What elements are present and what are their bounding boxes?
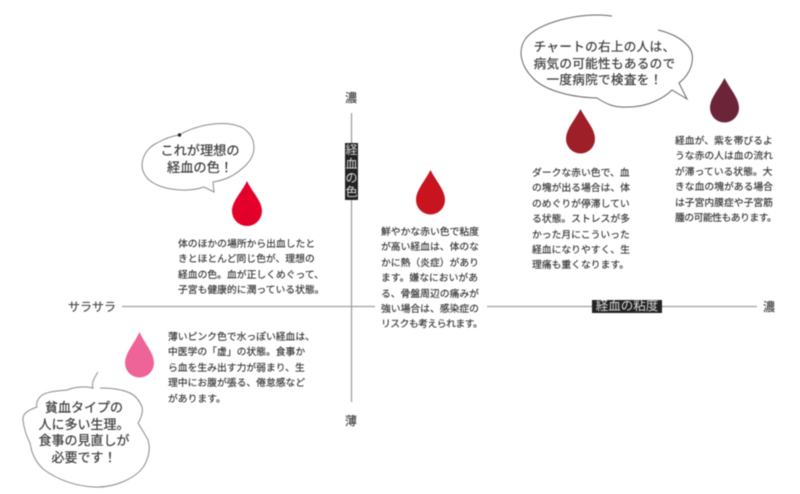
speech bubble: anemia type: 必要です！ xyxy=(51,450,116,465)
description: purple: きな血の塊がある場合 xyxy=(675,182,773,193)
description: ideal colour: きとほとんど同じ色が、理想の xyxy=(178,254,315,265)
speech bubble: anemia type: 貧血タイプの xyxy=(45,400,123,415)
axis label: thin: 薄 xyxy=(345,414,357,428)
description: vivid red: が高い経血は、体のな xyxy=(381,242,479,253)
description: dark red: かった月にこういった xyxy=(532,230,630,241)
description: purple: が滞っている状態。大 xyxy=(675,167,772,178)
speech bubble: ideal colour: 経血の色！ xyxy=(167,160,233,174)
description: dark red: 理痛も重くなります。 xyxy=(532,260,629,271)
description: pink: 薄いピンク色で水っぽい経血は、 xyxy=(168,332,315,343)
axis label: viscous: 濃 xyxy=(763,300,775,314)
description: vivid red: 鮮やかな赤い色で粘度 xyxy=(381,227,479,238)
description: purple xyxy=(674,134,776,224)
description: dark red: のめぐりが停滞してい xyxy=(532,199,630,210)
description: purple: 腫の可能性もあります。 xyxy=(675,213,776,224)
description: ideal colour: 子宮も健康的に潤っている状態。 xyxy=(178,285,324,296)
description: ideal colour: 体のほかの場所から出血したと xyxy=(178,239,315,250)
speech bubble: anemia type: 人に多い生理。 xyxy=(38,417,130,432)
description: dark red xyxy=(532,166,630,271)
description: dark red: ダークな赤い色で、血 xyxy=(532,168,630,179)
description: pink: があります。 xyxy=(168,394,226,405)
description: vivid red: かに熱（炎症）があり xyxy=(381,258,479,269)
description: purple: は子宮内膜症や子宮筋 xyxy=(675,198,773,209)
description: purple: うな赤の人は血の流れ xyxy=(675,151,773,162)
description: vivid red xyxy=(380,226,482,330)
horizontal axis title: 経血の粘度 xyxy=(596,299,658,313)
speech bubble: anemia type: 食事の見直しが xyxy=(38,433,130,448)
description: pink: 中医学の「虚」の状態。食事か xyxy=(168,347,305,358)
speech bubble: see a doctor: 病気の可能性もあるので xyxy=(534,56,675,70)
description: ideal colour: 経血の色。血が正しくめぐって、 xyxy=(178,270,324,281)
description: pink: ら血を生み出す力が弱まり、生 xyxy=(168,363,305,374)
description: purple: 経血が、紫を帯びるよ xyxy=(675,136,773,147)
description: pink xyxy=(168,330,315,405)
speech bubble: ideal colour: これが理想の xyxy=(160,143,240,158)
description: ideal colour xyxy=(178,238,324,296)
axis label: thick: 濃 xyxy=(345,91,357,105)
description: dark red: 経血になりやすく、生 xyxy=(532,245,630,256)
description: vivid red: リスクも考えられます。 xyxy=(381,319,482,330)
speech bubble: see a doctor: 一度病院で検査を！ xyxy=(546,73,663,87)
description: vivid red: 強い場合は、感染症の xyxy=(381,304,479,315)
description: vivid red: る、骨盤周辺の痛みが xyxy=(381,289,479,300)
description: dark red: る状態。ストレスが多 xyxy=(532,214,630,225)
vertical axis title: 経血の色 xyxy=(345,143,358,199)
description: vivid red: ます。嫌なにおいがあ xyxy=(381,273,478,284)
speech bubble: see a doctor: チャートの右上の人は、 xyxy=(534,40,675,54)
description: pink: 理中にお腹が張る、倦怠感など xyxy=(168,378,305,389)
description: dark red: の塊が出る場合は、体 xyxy=(532,183,630,194)
axis label: smooth: サラサラ xyxy=(68,300,116,314)
